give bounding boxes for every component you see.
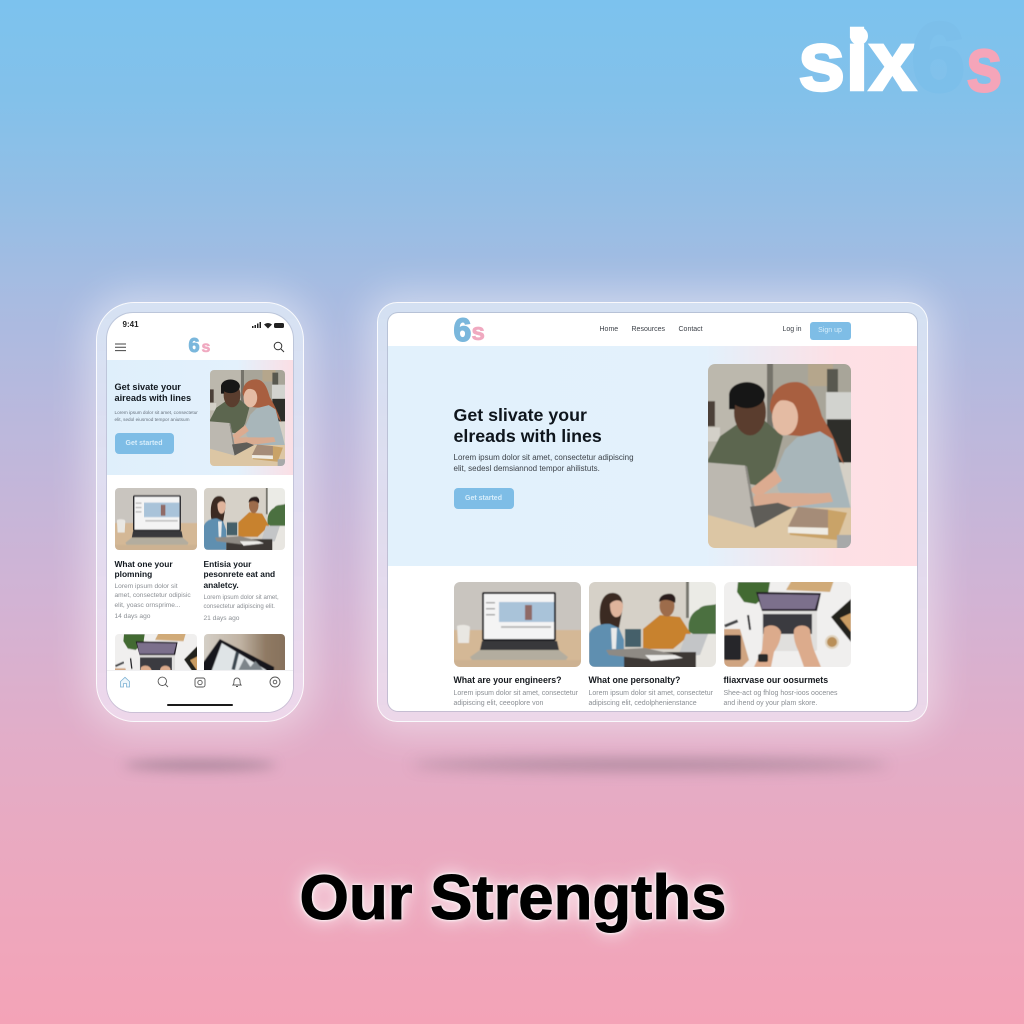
- icon: settings: [270, 676, 280, 688]
- card 2: [204, 488, 285, 622]
- card image: [724, 582, 851, 667]
- desktop mockup: [377, 302, 928, 722]
- card date: 14 days ago: [114, 612, 150, 620]
- card body: [114, 582, 191, 608]
- home indicator: [166, 704, 232, 706]
- hero body: [114, 410, 198, 422]
- hero body: Lorem ipsum dolor sit amet, consectetur adipiscing: [454, 452, 634, 462]
- bottom navigation: [106, 670, 292, 712]
- hero body: elit, sedesl demsiannod tempor ahilistuts.: [454, 464, 600, 473]
- brand logo: six6s: [798, 2, 1002, 112]
- card heading: plomning: [114, 569, 152, 579]
- card body: Shee-act og fhlog hosr-ioos oocenes: [724, 690, 838, 696]
- ground shadow: phone: [124, 760, 276, 770]
- phone hero: [106, 360, 292, 474]
- title: Our Strengths: [300, 863, 726, 933]
- hero button: Get started: [126, 440, 162, 446]
- status bar icons: [252, 322, 284, 328]
- hero button: [114, 432, 174, 454]
- card date: 21 days ago: [204, 614, 239, 622]
- card heading: [114, 558, 173, 579]
- hero body: Lorem ipsum dolor sit amet, consectetur: [114, 410, 198, 414]
- hero heading: elreads with lines: [454, 426, 602, 446]
- hero heading: Get sivate your: [114, 382, 181, 392]
- article card 2: [588, 582, 716, 706]
- hero heading: [454, 404, 602, 446]
- card 3 image: [115, 634, 197, 670]
- card body: and ihend oy your plam skore.: [724, 700, 817, 706]
- icon: home: [120, 676, 130, 688]
- icon: hamburger menu: [115, 344, 126, 352]
- card heading: [204, 558, 275, 590]
- card body: adipiscing elit, ceeoplore von: [454, 700, 543, 706]
- article card 1: [454, 582, 581, 706]
- nav link: Home: Home: [600, 326, 618, 332]
- desktop logo 6s: s: [472, 318, 485, 346]
- hero button: [454, 488, 514, 508]
- card heading: What are your engineers?: [454, 674, 562, 684]
- hero heading: [114, 382, 191, 402]
- phone logo 6s: 6: [188, 334, 200, 356]
- card body: [454, 690, 578, 706]
- logo letters: six: six: [798, 14, 916, 109]
- card body: Lorem ipsum dolor sit: [114, 582, 178, 590]
- hero photo: [210, 370, 285, 466]
- card heading: Entisia your: [204, 558, 251, 568]
- card heading: What one personalty?: [588, 674, 680, 684]
- hero body: elit, sedol eiusmod tempor aniutsum: [114, 416, 190, 422]
- card 1: [114, 488, 197, 620]
- hero body: [454, 452, 634, 473]
- icon: camera: [194, 678, 206, 688]
- card heading: analetcy.: [204, 580, 239, 590]
- logo i dot: [850, 27, 868, 45]
- card image: [589, 582, 716, 667]
- hero button: Get started: [465, 494, 502, 502]
- card body: elit, yoasc ornsprime...: [114, 602, 180, 608]
- card body: Lorem ipsum dolor sit amet,: [204, 594, 279, 600]
- ground shadow: desktop: [412, 759, 888, 770]
- phone screen: [106, 312, 292, 712]
- card image: [454, 582, 581, 667]
- desktop screen: [388, 312, 916, 710]
- nav link: Resources: Resources: [632, 326, 665, 332]
- card body: [724, 690, 838, 706]
- icon: search: [274, 342, 284, 352]
- desktop logo 6s: [454, 312, 485, 348]
- card body: consectetur adipiscing elit.: [204, 602, 275, 610]
- nav link: Log in: Log in: [782, 326, 802, 332]
- card image: [204, 488, 285, 550]
- phone logo 6s: [188, 334, 210, 356]
- article card 3: [724, 582, 851, 706]
- card heading: pesonrete eat and: [204, 569, 275, 579]
- logo letter: s: s: [966, 20, 1002, 108]
- hero heading: aireads with lines: [114, 392, 191, 402]
- phone logo 6s: s: [202, 338, 210, 356]
- sign up button: [810, 322, 850, 340]
- hero heading: Get slivate your: [454, 404, 587, 424]
- nav link: Contact: Contact: [678, 326, 703, 332]
- card body: Lorem ipsum dolor sit amet, consectetur: [454, 690, 578, 696]
- logo numeral: 6: 6: [911, 2, 966, 112]
- card body: [204, 594, 279, 610]
- card heading: What one your: [114, 558, 173, 568]
- card body: adipiscing elit, cedolphenienstance: [588, 700, 697, 706]
- card body: Lorem ipsum dolor sit amet, consectetur: [588, 690, 713, 696]
- card body: amet, consectetur odipisic: [114, 592, 191, 599]
- status bar time: 9:41: [122, 320, 139, 328]
- sign up button: Sign up: [818, 326, 842, 334]
- card body: [588, 690, 713, 706]
- card 4 image: [204, 634, 285, 670]
- desktop hero: [388, 346, 916, 566]
- icon: bell: [232, 678, 242, 687]
- icon: search: [158, 676, 168, 688]
- card image: [115, 488, 197, 550]
- phone mockup: [96, 302, 304, 722]
- hero photo: [708, 364, 851, 548]
- desktop logo 6s: 6: [454, 312, 471, 348]
- card heading: fliaxrvase our oosurmets: [724, 674, 828, 684]
